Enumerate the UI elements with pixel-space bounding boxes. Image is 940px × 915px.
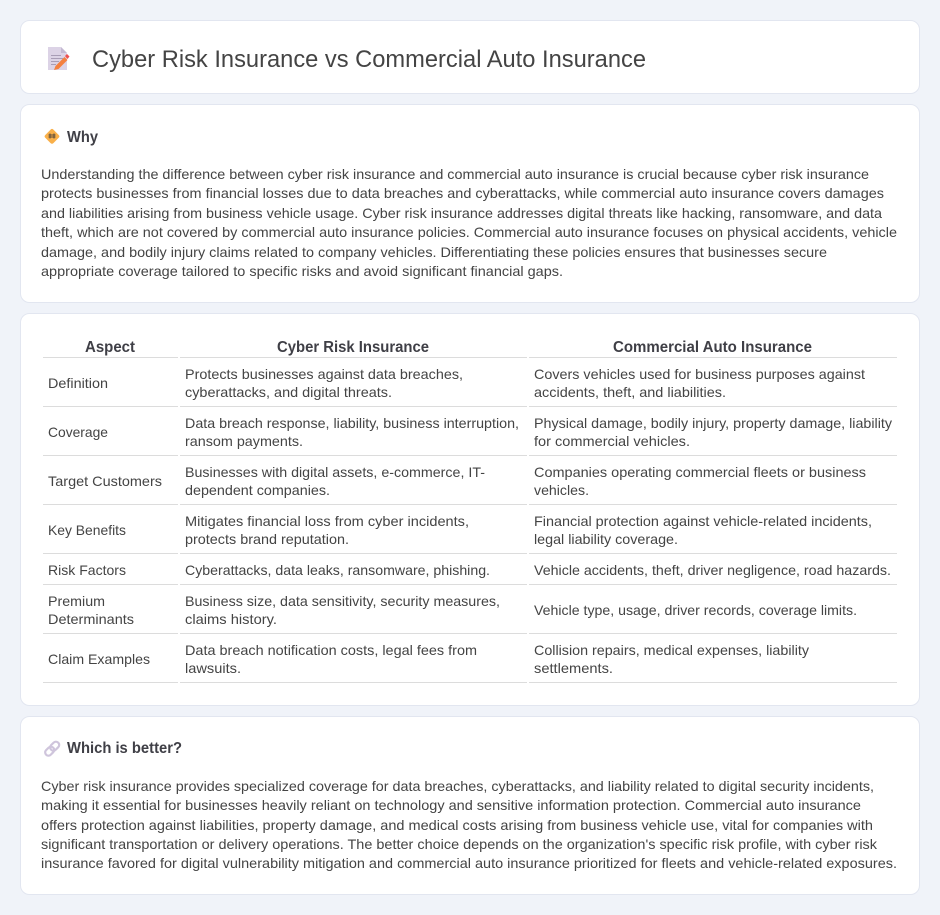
table row: coverage: Coverage [48,424,108,440]
table row: risk factors [43,562,897,584]
table row: risk factors: Vehicle accidents, theft, driver negligence, road hazards. [534,562,891,578]
table row: key benefits [43,513,897,554]
table row: premium determinants: Premium [48,593,105,609]
table row: coverage: ransom payments. [185,433,303,449]
table row: risk factors: Risk Factors [48,562,126,578]
table row: definition [43,366,897,406]
table row: definition: Protects businesses against data breaches, [185,366,463,382]
table row: coverage: Physical damage, bodily injury, property damage, liability [534,415,892,431]
table row: claim examples: settlements. [534,660,613,676]
table row: claim examples: lawsuits. [185,660,241,676]
why paragraph [41,166,897,279]
table row: claim examples: Collision repairs, medical expenses, liability [534,642,809,658]
which is better paragraph: Cyber risk insurance provides specialized coverage for data breaches, cyberattacks, and liability related to digital security incidents, [41,778,874,794]
table row: key benefits: Mitigates financial loss from cyber incidents, [185,513,469,529]
table row: definition: accidents, theft, and liabilities. [534,384,726,400]
why paragraph: protects businesses from financial losses due to data breaches and cyberattacks, while commercial auto insurance covers damages [41,185,884,201]
table header row: Cyber Risk Insurance [277,339,429,356]
table row: key benefits: protects brand reputation. [185,531,349,547]
table row: risk factors: Cyberattacks, data leaks, ransomware, phishing. [185,562,490,578]
heading: why: Why [67,129,98,146]
why paragraph: Understanding the difference between cyber risk insurance and commercial auto insurance is crucial because cyber risk insurance [41,166,869,182]
icon: orange diamond [44,128,60,144]
table row: key benefits: legal liability coverage. [534,531,678,547]
table row: definition: Covers vehicles used for business purposes against [534,366,865,382]
table row: target customers: Businesses with digital assets, e-commerce, IT- [185,464,485,480]
table row: premium determinants: claims history. [185,611,277,627]
table row: coverage: for commercial vehicles. [534,433,690,449]
table row: definition: cyberattacks, and digital threats. [185,384,392,400]
panel: comparison table [20,314,920,706]
table row: premium determinants: Business size, data sensitivity, security measures, [185,593,500,609]
table row: claim examples: Claim Examples [48,651,150,667]
which is better paragraph: significant transportation or delivery operations. The better choice depends on the organization's specific risk profile, with cyber risk [41,836,878,852]
why paragraph: appropriate coverage tailored to specific risks and avoid significant financial gaps. [41,263,563,279]
table row: target customers [43,464,897,504]
table row: target customers: Companies operating commercial fleets or business [534,464,866,480]
table row: key benefits: Financial protection against vehicle-related incidents, [534,513,872,529]
table row: target customers: Target Customers [48,473,162,489]
table row: coverage: Data breach response, liability, business interruption, [185,415,519,431]
which is better paragraph: insurance favored for digital vulnerability mitigation and commercial auto insurance prioritized for fleets and vehicle-related exposures. [41,855,897,871]
which is better paragraph [41,778,897,871]
table row: premium determinants: Vehicle type, usage, driver records, coverage limits. [534,602,857,618]
table row: premium determinants: Determinants [48,611,134,627]
which is better paragraph: offers protection against liabilities, property damage, and medical costs arising from business vehicle use, vital for companies with [41,817,873,833]
which is better paragraph: making it essential for businesses heavily reliant on technology and sensitive information protection. Commercial auto insurance [41,797,861,813]
table header row [43,339,897,358]
why paragraph: and liabilities arising from business vehicle usage. Cyber risk insurance addresses digital threats like hacking, ransomware, and data [41,205,882,221]
table row: claim examples [43,642,897,682]
table row: target customers: vehicles. [534,482,589,498]
panel: why [20,104,920,302]
icon: chain link [44,740,61,757]
heading: which is better: Which is better? [67,740,182,757]
table row: coverage [43,415,897,456]
table header row: Aspect [85,339,136,356]
panel: title header [20,20,920,94]
table header row: Commercial Auto Insurance [613,339,812,356]
panel: which is better [20,716,920,894]
table row: target customers: dependent companies. [185,482,330,498]
table row: claim examples: Data breach notification costs, legal fees from [185,642,477,658]
icon: document with pencil [48,47,70,70]
table row: definition: Definition [48,375,108,391]
why paragraph: theft, which are not covered by commercial auto insurance policies. Commercial auto insurance focuses on physical accidents, vehicle [41,224,897,240]
why paragraph: damage, and bodily injury claims related to company vehicles. Differentiating these policies ensures that businesses secure [41,244,827,260]
title text: Cyber Risk Insurance vs Commercial Auto Insurance [92,46,646,73]
table row: key benefits: Key Benefits [48,522,126,538]
table row: premium determinants [43,593,897,634]
